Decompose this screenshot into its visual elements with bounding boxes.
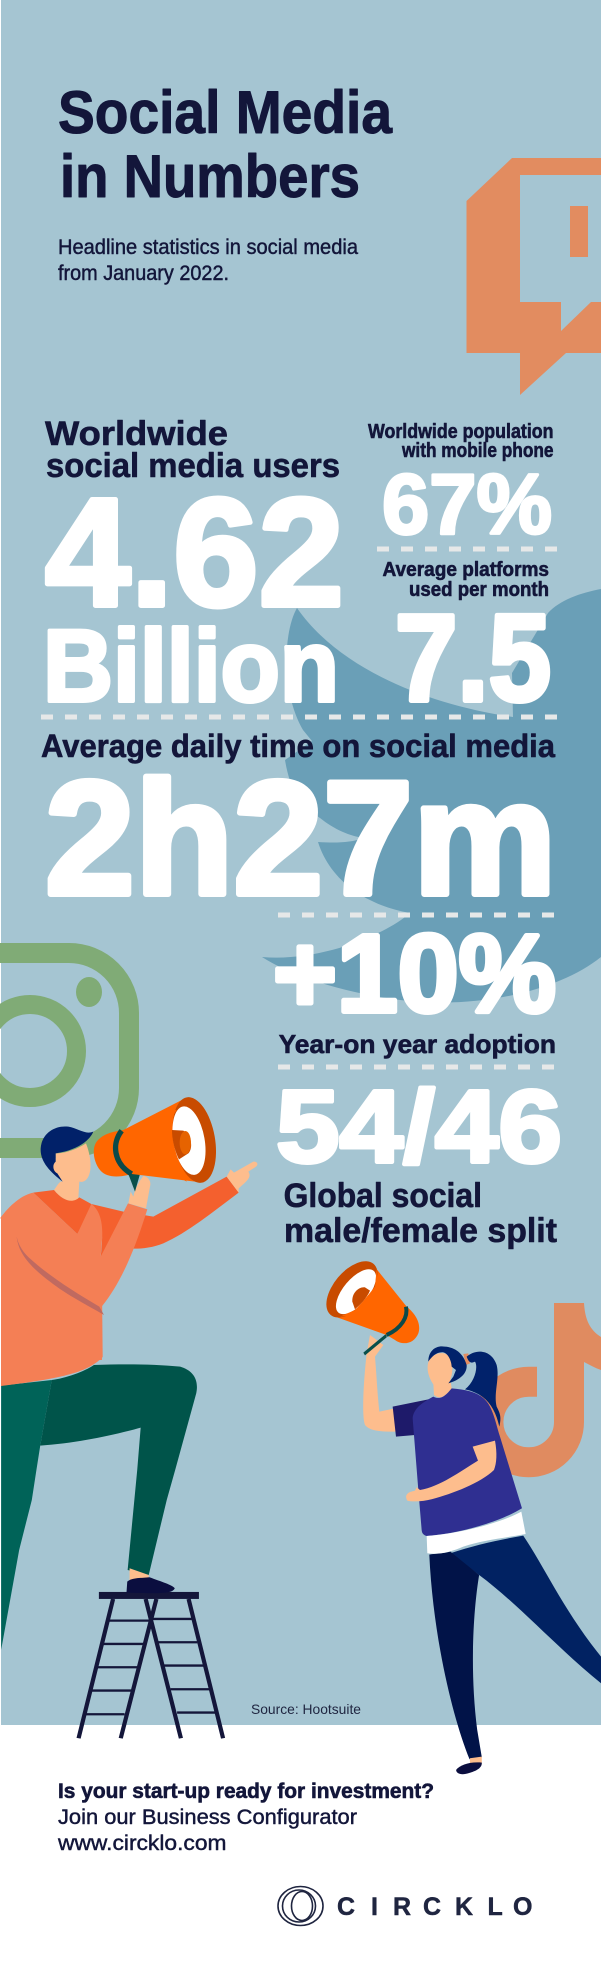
face [428,1353,452,1387]
heading: mobile phone population: with mobile phone [401,440,554,462]
pointing hand [227,1162,257,1193]
icon: tiktok logo [488,1303,601,1462]
extended arm [91,1177,239,1257]
heading: worldwide social media users: Worldwide [45,415,228,453]
heading: mobile phone population [368,421,554,462]
source: Source: Hootsuite [251,1701,361,1717]
heading: mobile phone population: Worldwide population [368,421,554,443]
subtitle: from January 2022. [58,262,229,285]
sash shadow [17,1237,104,1315]
heading: average platforms [382,559,549,601]
face and neck [53,1143,91,1201]
hair tie [463,1353,470,1365]
head hair [428,1346,467,1383]
raised arm [363,1335,397,1432]
stat: 54/46: 54/46 [276,1069,562,1184]
icon: instagram logo [0,953,129,1148]
icon: twitch logo [466,158,601,395]
title [58,79,393,210]
subtitle: Headline statistics in social media [58,236,358,259]
forearm [406,1441,496,1501]
ponytail [465,1352,500,1427]
stat: 4.62: 4.62 [45,466,344,638]
shirt [413,1388,522,1536]
sweater [0,1193,147,1360]
heading: worldwide social media users [45,415,340,485]
title: in Numbers [60,143,360,210]
upper body [317,1252,526,1554]
logo: circklo: CIRCKLO [337,1893,532,1921]
subtitle [58,236,358,285]
heading: worldwide social media users: social media users [46,447,340,485]
neck [433,1377,452,1397]
heading: male/female split: Global social [284,1177,482,1215]
heading: male/female split: male/female split [284,1212,557,1250]
upper body [0,1094,257,1360]
legs and shoe [429,1536,601,1774]
illustration: woman with megaphone [317,1252,601,1774]
hem [427,1512,526,1554]
call to action: Join our Business Configurator [58,1806,357,1829]
stat: 7.5: 7.5 [395,590,551,728]
lower sweater [1,1290,103,1386]
hair [41,1126,93,1182]
stat: Billion: Billion [43,609,339,723]
call to action: Is your start-up ready for investment? [58,1780,434,1803]
call to action: www.circklo.com [57,1832,226,1855]
ladder and legs [1,1364,223,1738]
stat: +10%: +10% [273,912,556,1036]
megaphone [317,1252,419,1355]
heading: average daily time: Average daily time on social media [41,728,555,764]
hand on megaphone [128,1176,150,1208]
heading: average platforms: used per month [409,579,549,601]
stat: 2h27m: 2h27m [45,748,556,929]
stat: 67%: 67% [382,458,552,552]
collar [33,1190,91,1234]
heading: average platforms: Average platforms [382,559,549,581]
heading: year-on year adoption: Year-on year adoption [279,1029,556,1059]
logo: circklo [278,1886,532,1926]
megaphone [94,1094,222,1192]
icon: twitter bird [262,589,601,1003]
illustration: man with megaphone on ladder [0,1094,257,1738]
call to action [57,1780,434,1855]
sleeve [393,1398,433,1437]
title: Social Media [58,79,393,146]
heading: male/female split [284,1177,557,1250]
